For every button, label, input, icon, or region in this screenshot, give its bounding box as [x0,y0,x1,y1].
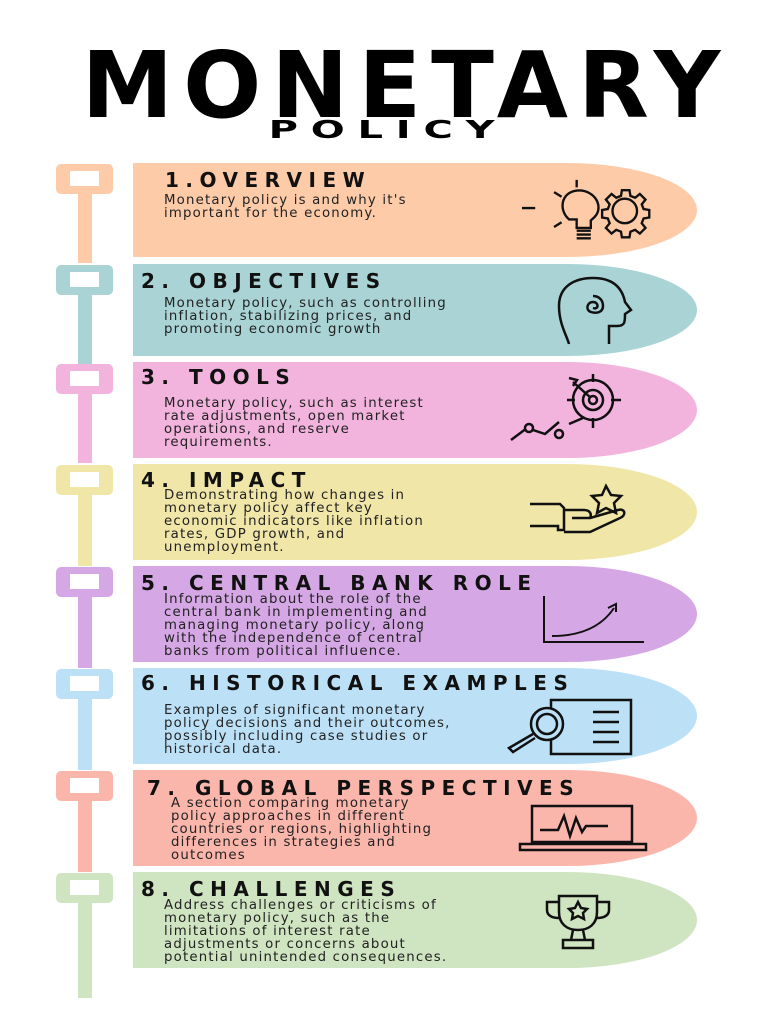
heading: 3. TOOLS [141,365,296,389]
connector 3 [56,364,113,463]
text: economic indicators like inflation [164,514,424,529]
text: Monetary policy, such as controlling [164,296,447,311]
text: unemployment. [164,540,285,555]
heading: 1.OVERVIEW [165,168,371,192]
connector 7 [56,771,113,872]
text [164,396,424,450]
text: inflation, stabilizing prices, and [164,309,412,324]
panel: central bank role [133,566,697,662]
text: outcomes [171,848,246,863]
panel: global perspectives [133,770,697,866]
text: rate adjustments, open market [164,409,406,424]
heading: 6. HISTORICAL EXAMPLES [141,671,574,695]
panel: challenges [133,872,697,968]
heading: 4. IMPACT [141,468,312,492]
text: Information about the role of the [164,592,422,607]
text: adjustments or concerns about [164,937,406,952]
text: countries or regions, highlighting [171,822,432,837]
panel: overview [133,163,697,257]
text: central bank in implementing and [164,605,428,620]
connector 2 [56,265,113,364]
text: Address challenges or criticisms of [164,898,437,913]
heading: 2. OBJECTIVES [141,269,387,293]
icon: head [558,276,633,344]
icon: trophy [546,894,610,950]
heading: 7. GLOBAL PERSPECTIVES [147,776,580,800]
text [164,296,447,337]
icon: hand with star [530,483,626,534]
connector 1 [56,164,113,263]
text: with the independence of central [164,631,423,646]
icon: magnifier and document [507,698,632,756]
connector 8 [56,873,113,998]
heading: 8. CHALLENGES [141,877,401,901]
connector 4 [56,465,113,566]
connector 6 [56,669,113,770]
icon: bulb and gear [522,180,650,240]
text: operations, and reserve [164,422,350,437]
text: important for the economy. [164,206,377,221]
text: banks from political influence. [164,644,402,659]
title: MONETARY [82,32,730,139]
connector 5 [56,567,113,668]
text [164,193,407,221]
text: Examples of significant monetary [164,703,426,718]
text: requirements. [164,435,273,450]
text [164,592,428,659]
text: managing monetary policy, along [164,618,425,633]
text [164,703,450,757]
text: Monetary policy is and why it's [164,193,407,208]
panel: tools [133,362,697,458]
text: differences in strategies and [171,835,396,850]
text: limitations of interest rate [164,924,371,939]
text [164,488,424,555]
heading: 5. CENTRAL BANK ROLE [141,571,538,595]
text: promoting economic growth [164,322,381,337]
text: Monetary policy, such as interest [164,396,424,411]
text: possibly including case studies or [164,729,428,744]
text: historical data. [164,742,282,757]
panel: historical examples [133,668,697,764]
icon: laptop chart [518,804,648,852]
text: policy decisions and their outcomes, [164,716,450,731]
subtitle: POLICY [269,115,507,144]
text [164,898,447,965]
text: rates, GDP growth, and [164,527,345,542]
text: policy approaches in different [171,809,405,824]
icon: target [510,374,621,441]
text: monetary policy, such as the [164,911,390,926]
text: A section comparing monetary [171,796,410,811]
panel: objectives [133,264,697,356]
panel: impact [133,464,697,560]
text: Demonstrating how changes in [164,488,405,503]
icon: growth chart [543,596,644,643]
text [171,796,432,863]
text: potential unintended consequences. [164,950,447,965]
text: monetary policy affect key [164,501,373,516]
